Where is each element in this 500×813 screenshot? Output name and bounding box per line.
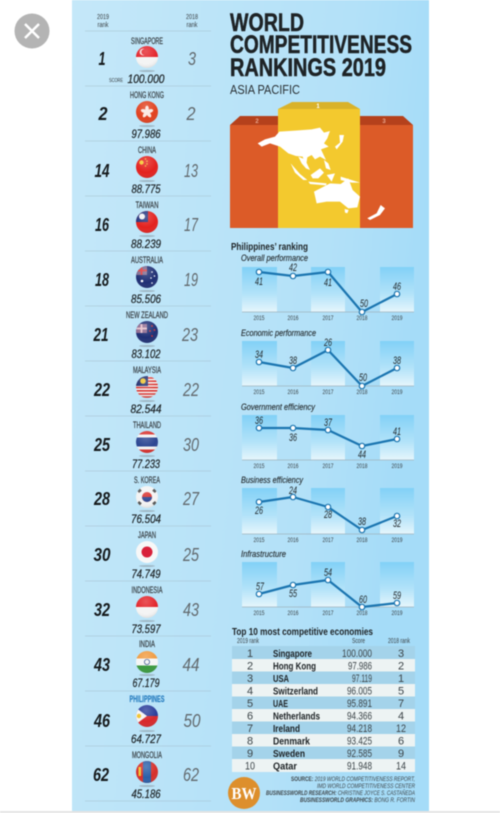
- ranking row: Thailand: 77.233: [132, 457, 160, 471]
- line chart: Business efficiency: 38: [358, 516, 367, 528]
- table: Top 10 most competitive economies: 7: [398, 698, 404, 710]
- ranking row: Hong Kong: 97.986: [132, 127, 161, 141]
- ranking row: Indonesia: INDONESIA: [132, 585, 162, 595]
- icon: close button: [14, 14, 50, 48]
- ranking row: Thailand: 25: [93, 435, 111, 455]
- map: Asia Pacific: [258, 128, 385, 220]
- line chart: Economic performance: 34: [255, 349, 263, 361]
- ranking row: Singapore: 3: [188, 49, 196, 69]
- ranking row: India: 67.179: [132, 676, 160, 690]
- icon: Australia flag: [136, 266, 158, 288]
- column header: 2019 rank: 2019: [97, 14, 109, 21]
- line chart: Business efficiency: 24: [288, 485, 297, 497]
- title: WORLD: [230, 9, 304, 37]
- ranking row: S. Korea: 27: [182, 489, 200, 509]
- icon: Thailand flag: [136, 431, 158, 453]
- ranking row: China: CHINA: [138, 145, 156, 155]
- icon: Hong Kong flag: [136, 101, 158, 123]
- icon: Malaysia flag: [136, 376, 158, 398]
- table: Top 10 most competitive economies: UAE: [273, 698, 288, 710]
- table: Top 10 most competitive economies: [232, 638, 415, 772]
- ranking row: Mongolia: 62: [93, 765, 109, 785]
- ranking row: Hong Kong: HONG KONG: [130, 90, 164, 100]
- table: Top 10 most competitive economies: USA: [273, 673, 289, 685]
- line chart: Infrastructure: 2017: [322, 610, 334, 617]
- ranking row: Malaysia: MALAYSIA: [133, 365, 161, 375]
- heading: Philippines' ranking: Philippines’ ranking: [231, 241, 308, 253]
- table: Top 10 most competitive economies: Denmark: [273, 736, 310, 748]
- table: Top 10 most competitive economies: 1: [247, 648, 253, 660]
- column header: 2018 rank: rank: [186, 22, 198, 29]
- ranking row: Taiwan: TAIWAN: [136, 200, 158, 210]
- table: Top 10 most competitive economies: 9: [247, 748, 253, 760]
- title: [230, 9, 412, 82]
- ranking row: Philippines (highlighted): 46: [93, 711, 111, 731]
- table: Top 10 most competitive economies: 12: [396, 723, 406, 735]
- ranking row: Mongolia: MONGOLIA: [132, 750, 162, 760]
- source credits: [266, 777, 416, 804]
- table: Top 10 most competitive economies: Hong Kong: [273, 660, 316, 672]
- line chart: Overall performance: 2017: [322, 315, 334, 322]
- ranking row: Mongolia: [93, 750, 199, 801]
- line chart: Business efficiency: 2016: [288, 537, 299, 544]
- column header: 2018 rank: 2018: [186, 14, 198, 21]
- table: Top 10 most competitive economies: 2: [398, 660, 404, 672]
- column header: 2019 rank: [97, 14, 109, 29]
- column header: 2019 rank: rank: [98, 22, 109, 29]
- ranking row: Taiwan: 16: [95, 215, 110, 235]
- line chart: Economic performance: 50: [359, 372, 368, 384]
- line chart: Business efficiency: 2017: [322, 537, 334, 544]
- line chart: Infrastructure: 55: [289, 588, 298, 600]
- line chart: Infrastructure: 54: [324, 567, 332, 579]
- podium block: rank 3: [360, 116, 413, 228]
- line chart: Government efficiency: 2019: [392, 463, 403, 470]
- ranking row: Australia: 18: [95, 270, 109, 290]
- line chart: Government efficiency: 36: [289, 432, 298, 444]
- icon: India flag: [136, 651, 158, 673]
- ranking row: China: 13: [184, 161, 198, 181]
- icon: Taiwan flag: [136, 211, 158, 233]
- table: Top 10 most competitive economies: 6: [398, 736, 404, 748]
- line chart: Government efficiency: 37: [324, 417, 333, 429]
- ranking row: Hong Kong: [98, 90, 196, 141]
- table: Top 10 most competitive economies: 94.366: [347, 710, 372, 722]
- table: Top 10 most competitive economies: 2: [247, 660, 253, 672]
- table header: 2018 rank: [388, 638, 410, 645]
- line chart: Overall performance: 2016: [288, 315, 299, 322]
- table: Top 10 most competitive economies: 3: [247, 673, 253, 685]
- ranking row: China: [94, 145, 198, 196]
- ranking row: Thailand: [93, 420, 199, 471]
- line chart: Infrastructure: 2019: [392, 610, 403, 617]
- line chart: Economic performance: 2016: [288, 389, 299, 396]
- table: Top 10 most competitive economies: 1: [398, 673, 404, 685]
- table: Top 10 most competitive economies: Singapore: [273, 648, 312, 660]
- table: Top 10 most competitive economies: 96.005: [347, 686, 372, 698]
- line chart: Government efficiency: 2017: [322, 463, 334, 470]
- ranking row: Taiwan: 17: [184, 215, 199, 235]
- table: Top 10 most competitive economies: 9: [398, 748, 404, 760]
- heading: Top 10 table: Top 10 most competitive economies: [232, 626, 373, 638]
- ranking row: S. Korea: [93, 475, 200, 526]
- podium block: rank 1: 1: [316, 104, 320, 110]
- ranking row: Malaysia: 22: [93, 380, 110, 400]
- ranking row: Philippines (highlighted): 50: [184, 711, 200, 731]
- ranking row: Indonesia: 43: [183, 600, 199, 620]
- table: Top 10 most competitive economies: Sweden: [273, 748, 305, 760]
- ranking row: Indonesia: [94, 585, 199, 636]
- table: Top 10 most competitive economies: 3: [398, 648, 404, 660]
- line chart: Infrastructure: 57: [256, 581, 265, 593]
- line chart: Overall performance: Overall performance: [241, 253, 308, 263]
- line chart: Economic performance: 2015: [254, 389, 265, 396]
- line chart: Infrastructure: Infrastructure: [241, 549, 286, 559]
- table header: [237, 638, 410, 645]
- line chart: Business efficiency: 32: [393, 518, 401, 530]
- table: Top 10 most competitive economies: 4: [247, 686, 253, 698]
- ranking row: Singapore: SCORE: [109, 78, 123, 84]
- ranking row: New Zealand: 23: [181, 325, 198, 345]
- ranking row: China: 88.775: [132, 182, 161, 196]
- line chart: Business efficiency: [241, 475, 414, 544]
- source credits: SOURCE: 2019 WORLD COMPETITIVENESS REPORT,: [291, 777, 415, 783]
- line chart: Overall performance: 2019: [392, 315, 403, 322]
- ranking row: S. Korea: 28: [93, 489, 110, 509]
- table: Top 10 most competitive economies: 8: [247, 736, 253, 748]
- table: Top 10 most competitive economies: 95.891: [347, 698, 372, 710]
- line chart: Infrastructure: 60: [359, 594, 368, 606]
- icon: China flag: [136, 156, 158, 178]
- line chart: Economic performance: Economic performance: [241, 328, 316, 338]
- subtitle: ASIA PACIFIC: [230, 82, 300, 97]
- icon: Japan flag: [136, 541, 158, 563]
- logo: BW: BW: [232, 784, 256, 803]
- ranking row: Japan: [94, 530, 200, 581]
- ranking row: Philippines (highlighted): 64.727: [131, 732, 162, 746]
- ranking row: India: 43: [93, 655, 110, 675]
- line chart: Government efficiency: Government efficiency: [241, 402, 315, 412]
- line chart: Business efficiency: 26: [254, 505, 264, 517]
- ranking row: India: [93, 639, 200, 690]
- line chart: Government efficiency: 44: [358, 449, 366, 461]
- ranking row: Japan: 25: [182, 545, 200, 565]
- ranking row: Hong Kong: 2: [186, 104, 196, 124]
- background panel: [72, 0, 429, 811]
- ranking row: Thailand: 30: [183, 435, 199, 455]
- icon: New Zealand flag: [136, 321, 158, 343]
- source credits: BUSINESSWORLD RESEARCH: CHRISTINE JOYCE S. CASTAÑEDA: [266, 790, 415, 797]
- ranking row: Malaysia: 82.544: [130, 402, 162, 416]
- line chart: Infrastructure: 59: [393, 590, 401, 602]
- table: Top 10 most competitive economies: Ireland: [273, 723, 300, 735]
- line chart: Overall performance: 2018: [356, 315, 368, 322]
- source credits: IMD WORLD COMPETITIVENESS CENTER: [317, 784, 416, 790]
- icon: Singapore flag: [136, 46, 158, 68]
- ranking row: Philippines (highlighted): PHILIPPINES: [130, 694, 164, 704]
- podium with map: [230, 102, 413, 228]
- line chart: Government efficiency: [241, 402, 414, 470]
- table header: Score: [352, 638, 365, 645]
- ranking row: Australia: 85.506: [131, 292, 161, 306]
- line chart: Infrastructure: [241, 549, 414, 617]
- ranking row: S. Korea: S. KOREA: [134, 475, 160, 485]
- line chart: Business efficiency: Business efficiency: [241, 475, 303, 485]
- table: Top 10 most competitive economies: 94.218: [347, 723, 372, 735]
- title: COMPETITIVENESS: [230, 31, 412, 59]
- ranking row: Malaysia: 22: [182, 380, 199, 400]
- icon: South Korea flag: [136, 486, 158, 508]
- table: Top 10 most competitive economies: 92.585: [347, 748, 372, 760]
- line chart: Overall performance: 46: [393, 281, 402, 293]
- ranking row: Singapore: 100.000: [128, 72, 165, 86]
- icon: Philippines flag: [132, 705, 158, 727]
- line chart: Overall performance: 41: [324, 277, 332, 289]
- table: Top 10 most competitive economies: 100.000: [342, 648, 372, 660]
- ranking row: S. Korea: 76.504: [131, 512, 161, 526]
- table: Top 10 most competitive economies: Qatar: [273, 760, 297, 772]
- ranking row: Mongolia: 62: [183, 765, 199, 785]
- line chart: Economic performance: [241, 328, 414, 396]
- ranking row: New Zealand: 21: [93, 325, 108, 345]
- ranking row: Thailand: THAILAND: [133, 420, 161, 430]
- line chart: Economic performance: 38: [393, 355, 402, 367]
- table header: 2019 rank: [237, 638, 259, 645]
- line chart: Economic performance: 2017: [322, 389, 334, 396]
- line chart: Economic performance: 26: [323, 337, 333, 349]
- line chart: Business efficiency: 28: [323, 509, 333, 521]
- ranking row: Australia: [95, 255, 198, 306]
- title: RANKINGS 2019: [230, 54, 386, 82]
- ranking row: Japan: 74.749: [132, 567, 161, 581]
- ranking row: Hong Kong: 2: [98, 104, 108, 124]
- ranking row: Indonesia: 73.597: [132, 622, 162, 636]
- line chart: Economic performance: 2018: [356, 389, 368, 396]
- source credits: BUSINESSWORLD GRAPHICS: BONG R. FORTIN: [300, 798, 416, 804]
- table: Top 10 most competitive economies: Netherlands: [273, 710, 320, 722]
- ranking row: Singapore: SINGAPORE: [131, 36, 163, 46]
- table: Top 10 most competitive economies: 97.986: [348, 660, 372, 672]
- table: Top 10 most competitive economies: 97.119: [352, 673, 372, 685]
- podium block: rank 3: 3: [382, 119, 386, 125]
- line chart: Government efficiency: 2018: [356, 463, 368, 470]
- line chart: Infrastructure: 2015: [254, 610, 265, 617]
- ranking row: Taiwan: [95, 200, 199, 251]
- line chart: Business efficiency: 2019: [392, 537, 403, 544]
- ranking row: India: 44: [182, 655, 200, 675]
- ranking row: Taiwan: 88.239: [131, 237, 161, 251]
- table: Top 10 most competitive economies: Switzerland: [273, 686, 318, 698]
- icon: Mongolia flag: [136, 761, 158, 783]
- line chart: Economic performance: 38: [289, 355, 298, 367]
- ranking row: Japan: 30: [94, 545, 110, 565]
- table: Top 10 most competitive economies: 93.425: [347, 736, 372, 748]
- ranking row: Indonesia: 32: [94, 600, 110, 620]
- podium block: rank 1: [278, 102, 360, 228]
- line chart: Overall performance: 50: [360, 298, 369, 310]
- line chart: Overall performance: [241, 253, 414, 322]
- line chart: Business efficiency: 2015: [254, 537, 265, 544]
- line chart: Overall performance: 2015: [254, 315, 265, 322]
- table: Top 10 most competitive economies: 4: [398, 710, 404, 722]
- line chart: Government efficiency: 41: [393, 426, 401, 438]
- ranking row: India: INDIA: [139, 639, 155, 649]
- ranking row: China: 14: [94, 161, 110, 181]
- table: Top 10 most competitive economies: 14: [396, 760, 406, 772]
- logo: BW: [228, 777, 260, 809]
- table: Top 10 most competitive economies: 5: [247, 698, 253, 710]
- ranking row: Singapore: 1: [98, 49, 106, 69]
- table: Top 10 most competitive economies: 91.948: [347, 760, 372, 772]
- line chart: Business efficiency: 2018: [356, 537, 368, 544]
- ranking row: Australia: AUSTRALIA: [131, 255, 163, 265]
- line chart: Overall performance: 42: [289, 262, 297, 274]
- ranking row: Australia: 19: [184, 270, 198, 290]
- podium block: rank 2: 2: [255, 119, 259, 125]
- podium block: rank 2: [230, 116, 278, 228]
- line chart: Government efficiency: 2016: [288, 463, 299, 470]
- ranking row: Singapore: [98, 36, 196, 86]
- line chart: Government efficiency: 36: [255, 415, 264, 427]
- line chart: Infrastructure: 2018: [356, 610, 368, 617]
- table: Top 10 most competitive economies: 5: [398, 686, 404, 698]
- ranking row: New Zealand: NEW ZEALAND: [126, 310, 168, 320]
- table: Top 10 most competitive economies: 6: [247, 710, 253, 722]
- ranking row: Philippines (highlighted): [93, 694, 200, 746]
- table: Top 10 most competitive economies: 10: [245, 760, 255, 772]
- ranking row: Japan: JAPAN: [138, 530, 156, 540]
- column header: 2018 rank: [186, 14, 198, 29]
- line chart: Economic performance: 2019: [392, 389, 403, 396]
- line chart: Infrastructure: 2016: [288, 610, 299, 617]
- ranking row: Malaysia: [93, 365, 199, 416]
- icon: Indonesia flag: [136, 596, 158, 618]
- ranking row: Mongolia: 45.186: [132, 787, 161, 801]
- line chart: Government efficiency: 2015: [254, 463, 265, 470]
- line chart: Overall performance: 41: [255, 276, 263, 288]
- ranking row: New Zealand: 83.102: [132, 347, 161, 361]
- ranking row: New Zealand: [93, 310, 198, 361]
- table: Top 10 most competitive economies: 7: [247, 723, 253, 735]
